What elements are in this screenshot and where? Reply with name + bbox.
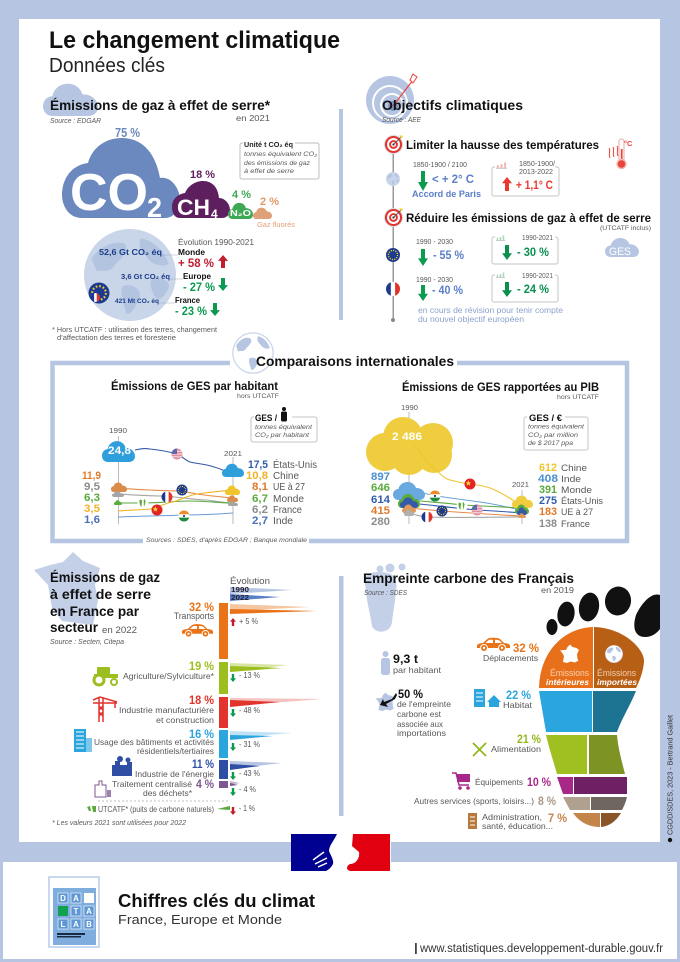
- logo: French Republic: [291, 834, 391, 871]
- cloud CH4: CH: [177, 195, 210, 220]
- legend evolution: 1990: [231, 587, 249, 594]
- cloud N2O: N₂O: [230, 208, 251, 218]
- title: Le changement climatique: [49, 27, 340, 54]
- cloud CO2: 2: [147, 192, 162, 223]
- box: observed warming: 2013-2022: [519, 169, 553, 176]
- sector UTCATF: UTCATF* (puits de carbone naturels): [98, 805, 214, 814]
- icon: target one: [384, 135, 403, 154]
- footer title: Chiffres clés du climat: [118, 891, 315, 911]
- evolution 1990-2021: Europe: [183, 272, 212, 281]
- icon: GES cloud: [605, 238, 639, 258]
- sector energy: - 43 %: [239, 769, 260, 778]
- cover thumbnail: A: [86, 907, 92, 916]
- divider bottom: [339, 576, 344, 816]
- flag France: [386, 282, 400, 296]
- panel: climate objectives: [366, 74, 651, 324]
- box EU result: 1990-2021: [522, 235, 553, 242]
- subheading temperatures: Limiter la hausse des températures: [406, 138, 599, 152]
- label habitat: [474, 688, 533, 710]
- heading: à effet de serre: [50, 586, 151, 602]
- title block: [49, 27, 340, 77]
- right values: [246, 459, 268, 527]
- objective paris: [412, 162, 481, 200]
- sector industry: [93, 693, 260, 725]
- cloud N2O: 4 %: [232, 189, 251, 201]
- sector waste: [95, 777, 256, 798]
- unit callout: de $ 2017 ppa: [528, 440, 573, 447]
- legend evolution: 2022: [231, 595, 249, 602]
- legend evolution: [230, 576, 292, 602]
- icon: target: [366, 74, 417, 124]
- sector industry: - 48 %: [239, 706, 260, 715]
- unit callout: Unité t CO₂ éq: [244, 140, 293, 149]
- left values: 415: [371, 505, 390, 517]
- label administration: 7 %: [548, 811, 567, 825]
- stat imports: associée aux: [397, 719, 444, 729]
- stat imports: 50 %: [398, 687, 423, 701]
- panel: emissions by sector in France: [34, 552, 323, 827]
- year labels: 2021: [224, 449, 242, 458]
- foot: administration segments: [573, 813, 621, 827]
- chart title: Émissions de GES par habitant: [111, 380, 278, 393]
- heading: en France par: [50, 603, 140, 619]
- cover thumbnail: A: [73, 920, 79, 929]
- label food: 21 %: [517, 732, 541, 746]
- objective paris: Accord de Paris: [412, 189, 481, 200]
- label transport: [477, 638, 539, 663]
- icon: GES cloud: GES: [609, 246, 631, 258]
- evolution 1990-2021: Évolution 1990-2021: [178, 237, 254, 247]
- box France result: - 24 %: [517, 282, 549, 296]
- right values: 183: [539, 506, 557, 518]
- source: Source : SDES: [364, 590, 407, 597]
- left values: [371, 471, 391, 528]
- heading: Empreinte carbone des Français: [363, 570, 574, 586]
- unit callout: à effet de serre: [244, 168, 294, 175]
- subheading emissions: Réduire les émissions de gaz à effet de serre: [406, 211, 651, 225]
- right country labels: Monde: [273, 494, 305, 505]
- footer: [49, 877, 663, 955]
- sector transports: 32 %: [189, 600, 214, 614]
- chart subtitle: hors UTCATF: [557, 394, 599, 401]
- panel: carbon footprint: [363, 564, 660, 831]
- box: observed warming: [492, 161, 559, 196]
- cover thumbnail: [49, 877, 99, 947]
- box France result: [492, 271, 558, 302]
- right country labels: Chine: [273, 471, 300, 482]
- left values: 897: [371, 471, 390, 483]
- sector waste: - 4 %: [239, 785, 256, 794]
- chart title: Émissions de GES rapportées au PIB: [402, 381, 599, 394]
- year labels: 1990: [109, 426, 127, 435]
- trend lines: [118, 449, 233, 517]
- sector buildings: - 31 %: [239, 740, 260, 749]
- label habitat: Habitat: [503, 700, 533, 710]
- year: en 2022: [102, 625, 137, 635]
- cloud fluorinated gases: 2 %: [260, 196, 279, 208]
- cover thumbnail: B: [86, 920, 92, 929]
- right values: 17,5: [248, 459, 268, 471]
- foot: services segments: [563, 797, 627, 810]
- objective paris: 1850-1900 / 2100: [413, 162, 467, 169]
- heading: secteur: [50, 619, 99, 635]
- right values: 408: [538, 473, 558, 485]
- cloud CH4: 18 %: [190, 169, 215, 181]
- label food: Alimentation: [491, 744, 541, 754]
- label transport: Déplacements: [483, 653, 538, 663]
- legend evolution: Évolution: [230, 576, 270, 587]
- target France: 1990 - 2030: [416, 277, 453, 284]
- right country labels: États-Unis: [561, 496, 603, 507]
- right country labels: Monde: [561, 485, 592, 496]
- icon: light foot: [365, 564, 406, 632]
- target EU: 1990 - 2030: [416, 239, 453, 246]
- revision note: en cours de révision pour tenir compte: [418, 306, 564, 315]
- evolution 1990-2021: - 23 %: [175, 304, 207, 318]
- source: Source : Secten, Citepa: [50, 639, 124, 646]
- chart subtitle: hors UTCATF: [237, 393, 279, 400]
- right values: 8,1: [252, 481, 268, 493]
- left values: 280: [371, 516, 390, 528]
- year: en 2021: [236, 113, 270, 123]
- clouds and flags: [393, 478, 533, 522]
- frame: [52, 363, 627, 541]
- stat imports: [376, 687, 451, 738]
- foot: toes: [546, 584, 660, 637]
- flag EU: [386, 248, 400, 262]
- year labels: [401, 403, 529, 489]
- label other services: [414, 794, 556, 808]
- cloud CH4: 4: [211, 207, 218, 221]
- website: www.statistiques.developpement-durable.gouv.fr: [419, 943, 663, 955]
- cloud N2O: [228, 189, 253, 219]
- label other services: Autres services (sports, loisirs...): [414, 796, 534, 806]
- foot: icons and labels: [546, 644, 637, 687]
- box: observed warming: + 1,1° C: [516, 178, 553, 192]
- cover thumbnail: D: [60, 894, 66, 903]
- subtitle: Données clés: [49, 55, 165, 77]
- right values: 275: [539, 495, 557, 507]
- cover thumbnail: L: [61, 920, 66, 929]
- sector energy: 11 %: [192, 757, 214, 771]
- sector agriculture: - 13 %: [239, 671, 260, 680]
- axes: [118, 436, 233, 524]
- sector transports: Transports: [174, 611, 214, 621]
- footnote: d'affectation des terres et foresterie: [57, 335, 176, 342]
- footnote: [52, 327, 217, 342]
- right country labels: UE à 27: [273, 482, 305, 493]
- label transport: 32 %: [513, 641, 539, 655]
- sector buildings: résidentiels/tertiaires: [137, 746, 214, 756]
- icon: France map: [34, 552, 100, 625]
- foot: food segments: [546, 735, 625, 774]
- sector waste: des déchets*: [143, 788, 193, 798]
- year labels: [109, 426, 242, 458]
- globe with volumes: [84, 229, 183, 321]
- source: Source : AEE: [382, 117, 421, 124]
- box EU result: - 30 %: [517, 245, 549, 259]
- unit callout: [524, 411, 588, 450]
- evolution wedges: [217, 604, 323, 810]
- cloud 1990 China: [366, 417, 453, 475]
- icon: thermometer: [609, 139, 633, 168]
- left values: 9,5: [84, 481, 100, 493]
- right values: 391: [539, 484, 557, 496]
- box: observed warming: 1850-1900/: [519, 161, 555, 168]
- stat imports: importations: [397, 728, 446, 738]
- label equipment: 10 %: [527, 775, 551, 789]
- footnote: * Hors UTCATF : utilisation des terres, changement: [52, 327, 217, 334]
- unit callout: [251, 407, 317, 442]
- cloud CO2: [62, 126, 180, 223]
- heading: Émissions de gaz: [50, 569, 160, 585]
- sector bars: [219, 603, 228, 788]
- label food: [473, 732, 541, 756]
- label habitat: 22 %: [506, 688, 531, 702]
- globe with volumes: 3,6 Gt CO₂ éq: [121, 272, 170, 281]
- unit callout: GES / €: [529, 413, 562, 423]
- cloud CO2: CO: [70, 164, 148, 222]
- label equipment: Équipements: [475, 777, 523, 787]
- cloud fluorinated gases: Gaz fluorés: [257, 222, 296, 229]
- label administration: [468, 811, 567, 831]
- sector industry: Industrie manufacturière: [119, 705, 214, 715]
- globe with volumes: 421 Mt CO₂ éq: [115, 298, 159, 305]
- box EU result: [492, 233, 558, 264]
- trend lines: [409, 443, 522, 517]
- stat per inhabitant: 9,3 t: [393, 652, 418, 666]
- label other services: 8 %: [538, 794, 556, 808]
- target EU: [416, 239, 464, 266]
- cloud CO2: 75 %: [115, 126, 140, 140]
- stat per inhabitant: par habitant: [393, 665, 442, 675]
- evolution 1990-2021: + 58 %: [178, 256, 214, 270]
- revision note: du nouvel objectif européen: [418, 315, 524, 324]
- foot: habitat segments: [539, 691, 636, 732]
- cover thumbnail: T: [74, 907, 79, 916]
- stat imports: carbone est: [397, 709, 442, 719]
- left values: 11,9: [82, 470, 101, 482]
- icon: globe small: [386, 172, 400, 186]
- stat per inhabitant: [381, 651, 442, 675]
- sector energy: [112, 756, 260, 780]
- box France result: 1990-2021: [522, 273, 553, 280]
- right country labels: [273, 460, 317, 527]
- unit callout: CO₂ par habitant: [255, 432, 310, 439]
- right country labels: Chine: [561, 463, 587, 474]
- value 1990: 2 486: [392, 431, 422, 443]
- year labels: 1990: [401, 403, 418, 412]
- unit callout: tonnes équivalent: [255, 424, 313, 431]
- evolution 1990-2021: France: [175, 296, 201, 305]
- right values: 10,8: [246, 470, 268, 482]
- foot: icons and labels: intérieures: [546, 677, 589, 687]
- heading: [50, 569, 160, 635]
- clouds and flags: [102, 441, 244, 522]
- right country labels: Inde: [561, 474, 581, 485]
- unit callout: CO₂ par million: [528, 432, 578, 439]
- label equipment: [452, 773, 551, 790]
- right values: 2,7: [252, 515, 268, 527]
- evolution 1990-2021: [175, 237, 254, 318]
- sector energy: Industrie de l'énergie: [135, 769, 214, 779]
- revision note: [418, 306, 564, 324]
- foot: icons and labels: Émissions: [550, 668, 589, 678]
- cover thumbnail: A: [73, 894, 79, 903]
- timeline: [391, 146, 395, 322]
- right country labels: Inde: [273, 516, 294, 527]
- icon: globe: [233, 333, 273, 373]
- sector agriculture: [94, 659, 260, 685]
- heading: Émissions de gaz à effet de serre*: [50, 97, 271, 113]
- panel: international comparisons: [52, 333, 627, 544]
- unit callout: GES /: [255, 413, 277, 423]
- right country labels: France: [273, 505, 303, 516]
- left values: 614: [371, 494, 391, 506]
- evolution 1990-2021: Monde: [178, 248, 206, 257]
- footnote: * Les valeurs 2021 sont utilisées pour 2022: [52, 820, 186, 827]
- unit callout: tonnes équivalent: [528, 424, 585, 430]
- cloud fluorinated gases: [253, 196, 296, 229]
- right country labels: UE à 27: [561, 507, 593, 518]
- sources: Sources : SDES, d'après EDGAR ; Banque mondiale: [146, 537, 307, 544]
- sector waste: Traitement centralisé: [112, 779, 192, 789]
- left values: 1,6: [84, 514, 100, 526]
- right country labels: [561, 463, 603, 530]
- source: Source : EDGAR: [50, 118, 101, 125]
- note UTCATF: (UTCATF inclus): [600, 225, 651, 232]
- sector industry: 18 %: [189, 693, 214, 707]
- right values: 612: [539, 462, 557, 474]
- sector transports: [174, 600, 258, 637]
- footer white band: [3, 862, 677, 959]
- globe with volumes: 52,6 Gt CO₂ éq: [99, 247, 162, 257]
- left values: [82, 470, 101, 526]
- sector buildings: 16 %: [189, 727, 214, 741]
- right values: [538, 462, 558, 530]
- unit callout: des émissions de gaz: [244, 160, 311, 167]
- foot: displacement segments: [539, 627, 644, 688]
- right values: 6,2: [252, 504, 268, 516]
- sector waste: 4 %: [196, 777, 214, 791]
- heading: Comparaisons internationales: [256, 353, 454, 369]
- panel: greenhouse gas emissions: [43, 84, 319, 342]
- foot: equipment segments: [557, 777, 627, 794]
- value 1990: 24,8: [108, 445, 131, 457]
- left values: 646: [371, 482, 390, 494]
- cloud CH4: [172, 169, 230, 221]
- target France: [416, 277, 463, 301]
- axes: [409, 412, 522, 524]
- chart: emissions per GDP: [366, 381, 603, 530]
- sector buildings: Usage des bâtiments et activités: [94, 737, 214, 747]
- footer subtitle: France, Europe et Monde: [118, 912, 282, 927]
- left values: 6,3: [84, 492, 100, 504]
- dashed separator: [98, 800, 230, 802]
- credit: CGDD/SDES, 2023 - Bertrand Gaillet: [668, 715, 674, 835]
- stat imports: de l'empreinte: [397, 699, 451, 709]
- evolution 1990-2021: - 27 %: [183, 280, 215, 294]
- unit callout: [240, 140, 319, 179]
- target France: - 40 %: [432, 283, 463, 297]
- sector UTCATF: - 1 %: [239, 804, 255, 813]
- sector buildings: [74, 727, 260, 756]
- chart: emissions per capita: [82, 380, 317, 527]
- icon: target two: [384, 208, 403, 227]
- sector agriculture: 19 %: [189, 659, 214, 673]
- sector industry: et construction: [156, 715, 214, 725]
- foot: icons and labels: importées: [597, 677, 637, 687]
- right values: 138: [539, 518, 557, 530]
- icon: thermometer: °C: [624, 139, 633, 148]
- label administration: Administration,: [482, 812, 542, 822]
- icon: heading cloud: [43, 84, 98, 116]
- objective paris: < + 2° C: [432, 172, 474, 186]
- unit callout: tonnes équivalent CO₂: [244, 151, 317, 158]
- heading: Objectifs climatiques: [382, 97, 523, 113]
- divider top: [339, 109, 343, 320]
- year: en 2019: [541, 585, 574, 595]
- sector UTCATF: [87, 804, 255, 815]
- right values: 6,7: [252, 493, 268, 505]
- target EU: - 55 %: [433, 248, 464, 262]
- foot: icons and labels: Émissions: [597, 668, 636, 678]
- sector agriculture: Agriculture/Sylviculture*: [123, 671, 215, 681]
- right country labels: États-Unis: [273, 460, 317, 471]
- label administration: santé, éducation...: [482, 821, 553, 831]
- left values: 3,5: [84, 503, 100, 515]
- year labels: 2021: [512, 480, 529, 489]
- right country labels: France: [561, 519, 590, 530]
- sector transports: + 5 %: [239, 617, 258, 626]
